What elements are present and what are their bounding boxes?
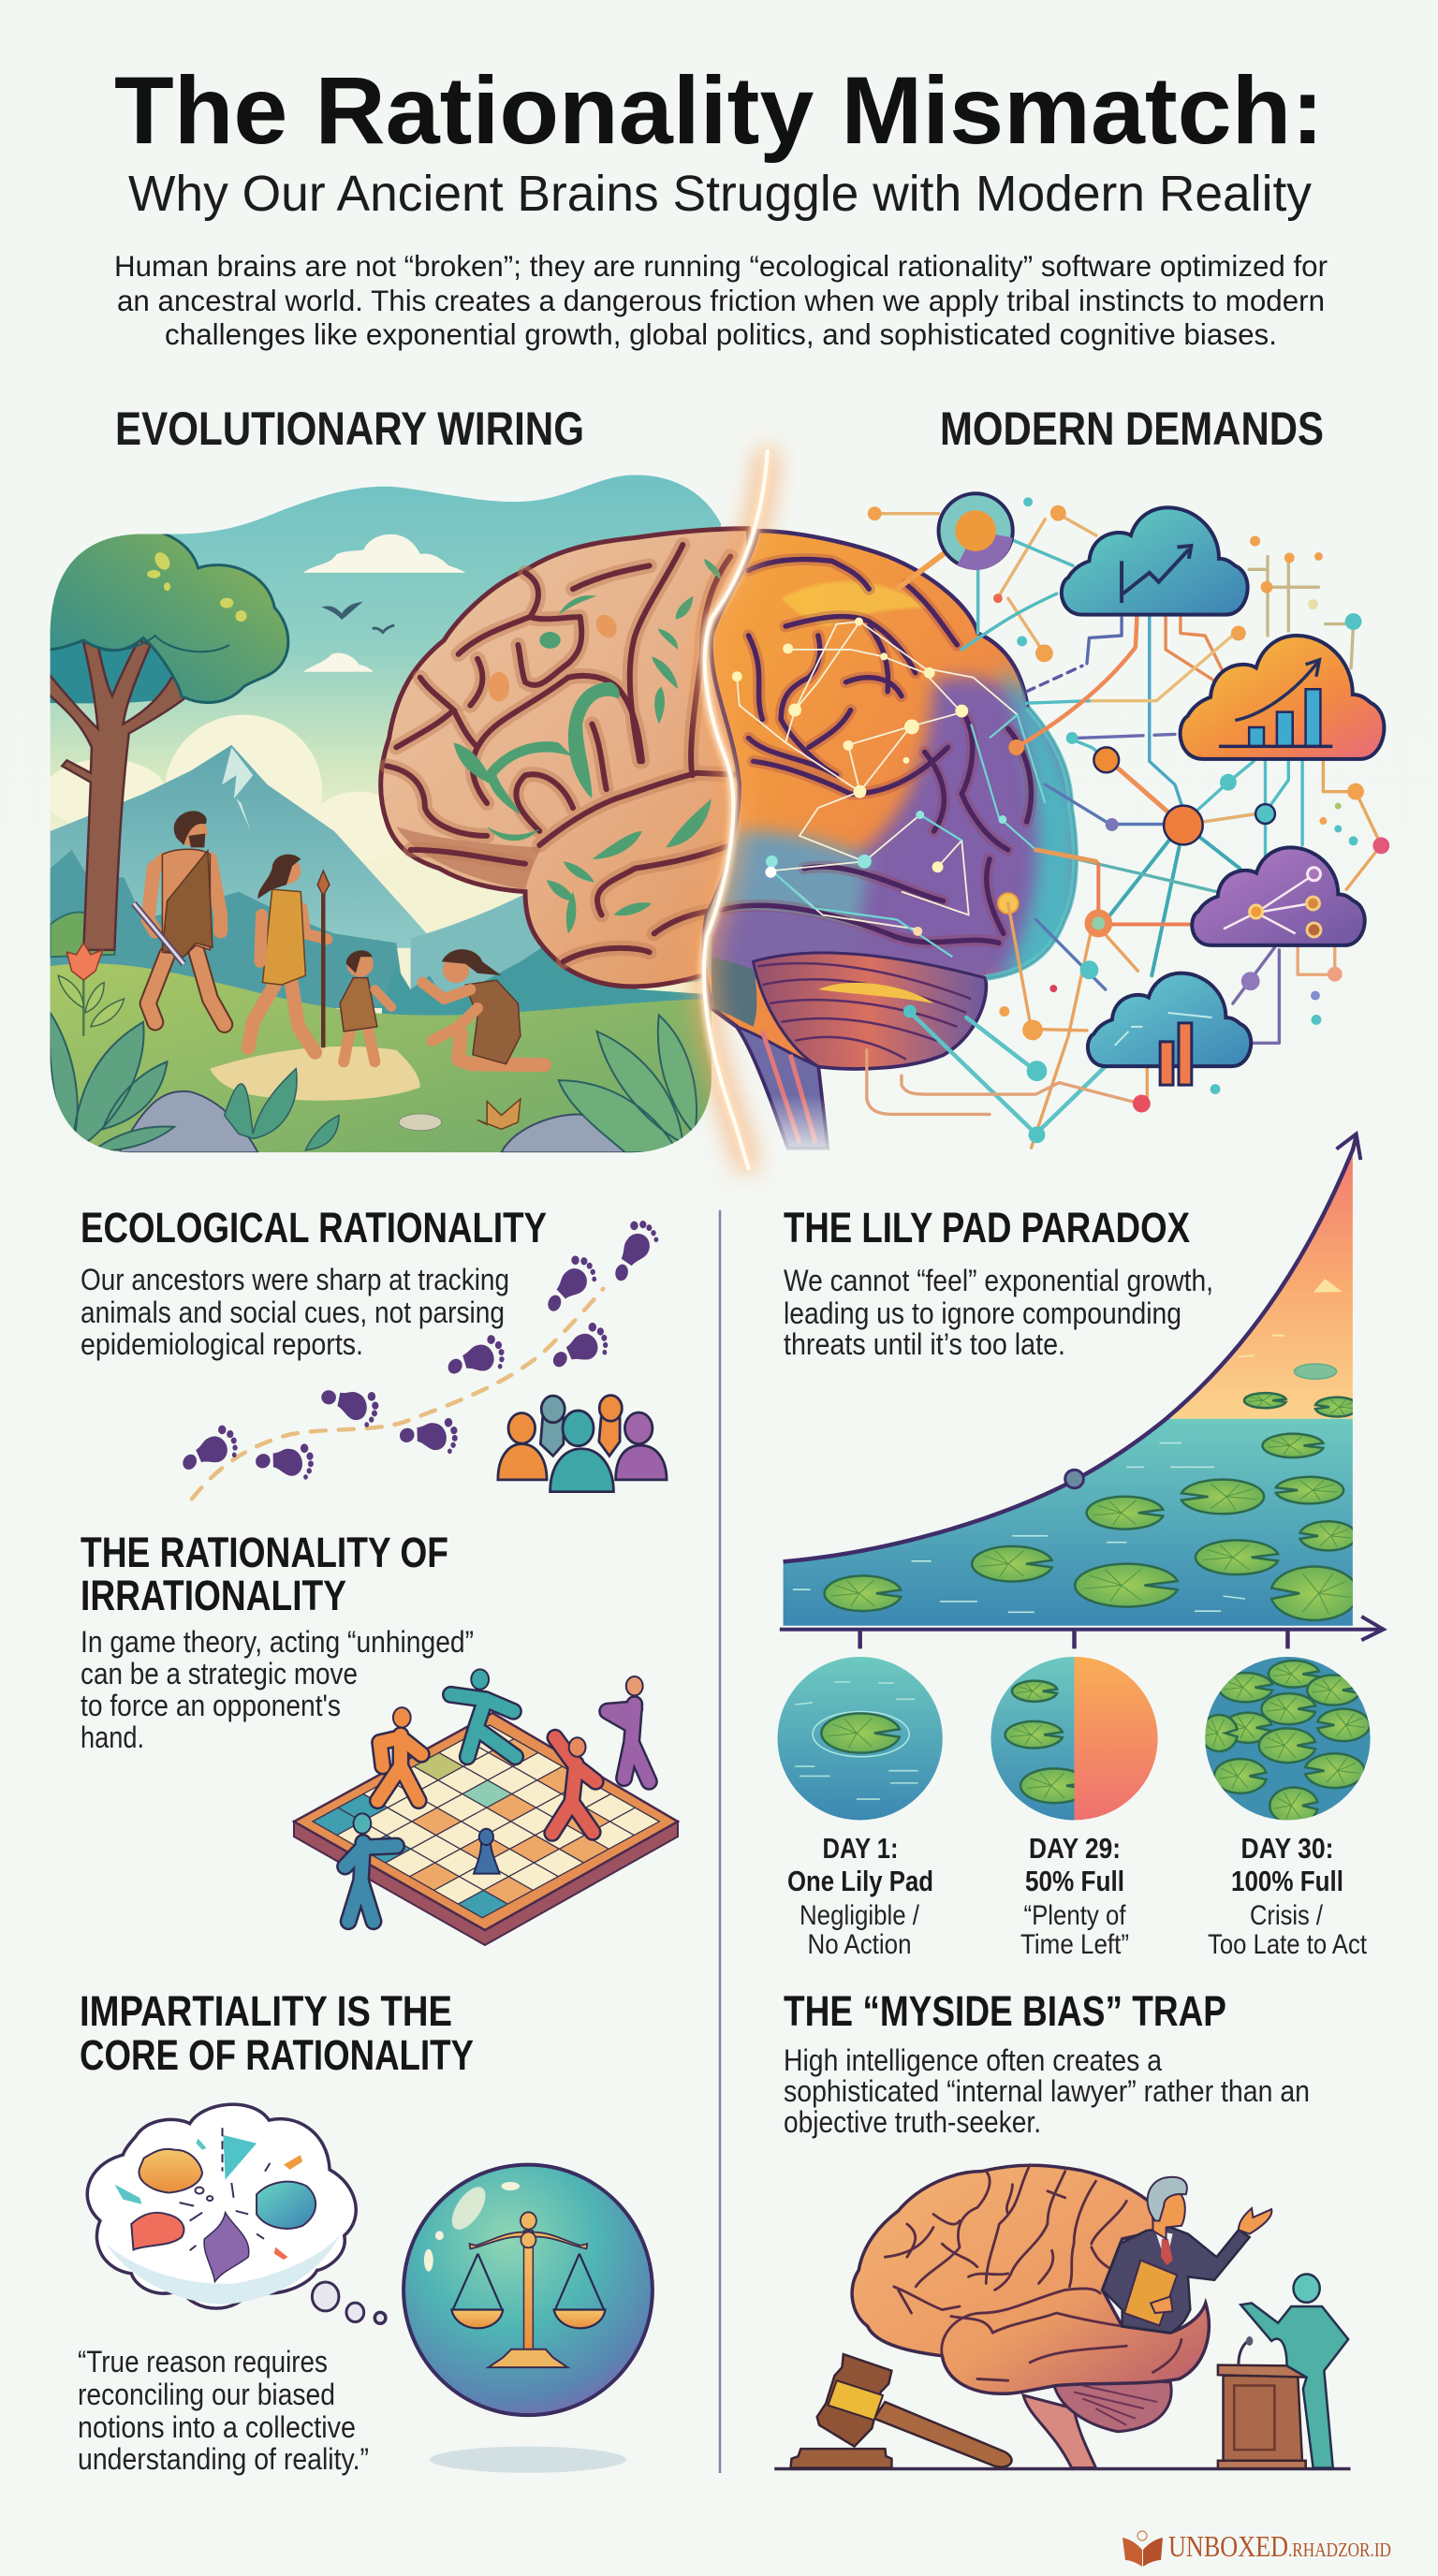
heading	[80, 1987, 474, 2079]
low bush	[51, 912, 114, 957]
tribe group icon	[498, 1396, 667, 1492]
heading: modern demands: MODERN DEMANDS	[940, 402, 1324, 455]
illustration: brain, networked right half	[702, 531, 1082, 1148]
game board	[294, 1669, 678, 1945]
suit	[1103, 2228, 1250, 2333]
day 29 vignette	[990, 1657, 1158, 1820]
body text: epidemiological reports.	[81, 1327, 363, 1361]
folder	[1124, 2261, 1177, 2325]
day 30 label	[1208, 1832, 1368, 1960]
logo wordmark: UNBOXED	[1168, 2529, 1288, 2563]
day 29 label	[1020, 1832, 1129, 1960]
hunter	[134, 811, 225, 1024]
day 30 label: DAY 30:	[1241, 1832, 1333, 1865]
heading: IRRATIONALITY	[81, 1572, 346, 1619]
panel: ancestral landscape scene	[43, 468, 726, 1152]
lower rim shading	[396, 827, 542, 889]
intro paragraph	[114, 249, 1328, 351]
illustration: data network and clouds	[867, 493, 1389, 1148]
body text: Our ancestors were sharp at tracking	[81, 1263, 509, 1296]
footprints trail	[180, 1216, 662, 1499]
players	[345, 1669, 649, 1922]
holding hand	[1151, 2296, 1173, 2313]
thought bubble	[87, 2104, 386, 2323]
courtroom illustration	[774, 2165, 1351, 2469]
neuron web	[737, 622, 1018, 929]
water fill	[784, 1419, 1353, 1626]
time axis	[780, 1617, 1384, 1648]
intro paragraph: challenges like exponential growth, global politics, and sophisticated cognitive biases.	[165, 317, 1277, 351]
day 1 label	[787, 1832, 933, 1960]
glowing seam between hemispheres	[704, 449, 768, 1170]
body text: animals and social cues, not parsing	[81, 1295, 505, 1329]
bubble outline	[87, 2104, 356, 2308]
heading: evolutionary wiring: EVOLUTIONARY WIRING	[115, 402, 584, 455]
scales	[451, 2212, 605, 2367]
clock node	[939, 493, 1013, 570]
shadow	[430, 2447, 626, 2473]
body text	[784, 1264, 1213, 1361]
distant forest	[382, 947, 703, 1016]
speaker figure	[1240, 2275, 1348, 2467]
teal player	[450, 1669, 516, 1757]
day 30 label: Too Late to Act	[1208, 1929, 1368, 1960]
orb	[404, 2165, 653, 2415]
brain folds	[885, 2165, 1181, 2380]
body text	[81, 1625, 474, 1754]
blue player	[345, 1813, 396, 1922]
body text: to force an opponent's	[81, 1689, 341, 1722]
child	[340, 950, 391, 1061]
heading: THE LILY PAD PARADOX	[784, 1204, 1190, 1251]
sand path	[210, 1046, 420, 1101]
red player	[552, 1737, 595, 1833]
network connectors	[867, 514, 1381, 1148]
canopy underside	[48, 626, 243, 703]
body text: leading us to ignore compounding	[784, 1296, 1181, 1330]
brain stem	[737, 1027, 828, 1148]
ancestors	[134, 811, 544, 1065]
logo: unboxed	[1123, 2529, 1391, 2567]
section: impartiality	[78, 1987, 653, 2476]
board frame	[294, 1713, 678, 1930]
trailing bubbles	[312, 2282, 386, 2323]
clouds	[303, 534, 465, 672]
brain stem fade	[730, 1095, 852, 1163]
quote	[78, 2345, 369, 2476]
heading: ECOLOGICAL RATIONALITY	[81, 1204, 547, 1251]
heading: THE RATIONALITY OF	[81, 1529, 448, 1576]
growth curve	[784, 1136, 1357, 1561]
green leaf veins	[453, 559, 721, 933]
hand raised	[1239, 2208, 1271, 2234]
crouching figure	[422, 949, 544, 1065]
quote: notions into a collective	[78, 2410, 356, 2444]
day 29 label: DAY 29:	[1029, 1832, 1121, 1865]
intro paragraph: an ancestral world. This creates a dangerous friction when we apply tribal instincts to modern	[117, 284, 1325, 317]
board cells	[313, 1725, 659, 1918]
body text: sophisticated “internal lawyer” rather than an	[784, 2074, 1310, 2108]
midpoint marker	[1065, 1470, 1083, 1488]
board side	[294, 1822, 678, 1945]
ground	[51, 963, 712, 1152]
teal blob	[257, 2182, 315, 2229]
colour wash: purple and teal blend	[702, 581, 1082, 980]
column divider	[719, 1210, 721, 2473]
hair	[1148, 2177, 1187, 2220]
cortex fold shading	[387, 545, 749, 961]
fragments	[274, 2155, 302, 2260]
body text: High intelligence often creates a	[784, 2043, 1162, 2077]
cortex folds	[387, 545, 749, 961]
body text	[81, 1263, 509, 1361]
quote: reconciling our biased	[78, 2378, 335, 2411]
cortex fold shading	[721, 559, 1031, 943]
heading: CORE OF RATIONALITY	[80, 2031, 474, 2079]
gavel	[791, 2354, 1012, 2467]
tree crown	[48, 527, 288, 703]
body text: We cannot “feel” exponential growth,	[784, 1264, 1213, 1297]
section: lily pad paradox	[777, 1134, 1384, 1960]
cortex folds	[721, 559, 1031, 943]
neuron nodes	[732, 618, 1024, 936]
exponential growth chart	[780, 1134, 1384, 1648]
day 1 label: Negligible /	[800, 1900, 920, 1931]
day 1 vignette	[777, 1657, 943, 1820]
teal shard	[223, 2135, 257, 2179]
danger zone fill	[1167, 1150, 1353, 1419]
title: The Rationality Mismatch:	[114, 57, 1324, 164]
head	[1152, 2191, 1185, 2239]
cerebellum	[1054, 2379, 1171, 2432]
lily pads	[825, 1364, 1358, 1620]
intro paragraph: Human brains are not “broken”; they are running “ecological rationality” software optimized for	[114, 249, 1328, 283]
orange blob	[139, 2149, 202, 2193]
network nodes	[868, 497, 1389, 1143]
far hills	[410, 895, 702, 992]
foreground plants and rocks	[50, 943, 697, 1152]
section: myside bias trap	[774, 1987, 1351, 2469]
subtitle: Why Our Ancient Brains Struggle with Modern Reality	[128, 166, 1312, 222]
illustration: brain, primal left half	[381, 529, 749, 987]
large brain	[852, 2165, 1209, 2393]
cloud: blue bars	[1088, 973, 1251, 1085]
day 29 label: 50% Full	[1025, 1865, 1124, 1897]
orange player	[377, 1707, 421, 1801]
body text: objective truth-seeker.	[784, 2105, 1041, 2139]
day 1 label: One Lily Pad	[787, 1865, 933, 1897]
tree	[48, 527, 288, 957]
day 1 label: No Action	[807, 1929, 912, 1960]
purple shard	[204, 2213, 249, 2282]
cloud: bar chart	[1181, 636, 1384, 759]
chess pawn	[474, 1829, 500, 1874]
section: ecological rationality	[81, 1204, 667, 1499]
sphere with scales of justice	[404, 2165, 653, 2473]
day 30 label: Crisis /	[1250, 1900, 1324, 1931]
mountain	[51, 745, 439, 952]
quote: “True reason requires	[78, 2345, 328, 2378]
day 29 label: Time Left”	[1020, 1929, 1129, 1960]
day 30 label: 100% Full	[1231, 1865, 1343, 1897]
red blob	[131, 2213, 183, 2249]
heading: THE “MYSIDE BIAS” TRAP	[784, 1987, 1226, 2035]
logo icon: open book	[1123, 2531, 1163, 2567]
cerebellum	[754, 953, 986, 1069]
logo: unboxed: .RHADZOR.ID	[1288, 2539, 1391, 2561]
tree trunk	[48, 640, 217, 950]
podium	[1218, 2336, 1307, 2468]
body text: can be a strategic move	[81, 1657, 358, 1690]
cloud: line chart	[1062, 507, 1248, 615]
body text: hand.	[81, 1720, 144, 1754]
body text: In game theory, acting “unhinged”	[81, 1625, 474, 1659]
day 1 label: DAY 1:	[822, 1832, 899, 1865]
lawyer figure	[1103, 2177, 1271, 2333]
heading	[81, 1529, 448, 1619]
cloud: branching nodes	[1192, 847, 1365, 945]
section: rationality of irrationality	[81, 1529, 678, 1945]
birds	[327, 604, 394, 633]
shirt and tie	[1155, 2231, 1173, 2263]
right hemisphere shape	[704, 531, 1076, 1148]
teal glass rim	[985, 708, 1076, 978]
day 30 vignette	[1201, 1657, 1371, 1823]
heading: IMPARTIALITY IS THE	[80, 1987, 452, 2035]
brain stem	[1023, 2395, 1096, 2467]
ground line	[774, 2467, 1351, 2470]
woman with spear	[248, 855, 330, 1052]
quote: understanding of reality.”	[78, 2442, 369, 2476]
sun and clouds on horizon	[51, 715, 388, 831]
data clouds	[1062, 507, 1384, 1085]
purple player	[608, 1676, 649, 1781]
body text	[784, 2043, 1310, 2139]
day 29 label: “Plenty of	[1024, 1900, 1126, 1931]
body text: threats until it’s too late.	[784, 1327, 1065, 1361]
sky	[51, 476, 721, 1020]
left hemisphere shape	[381, 529, 749, 987]
